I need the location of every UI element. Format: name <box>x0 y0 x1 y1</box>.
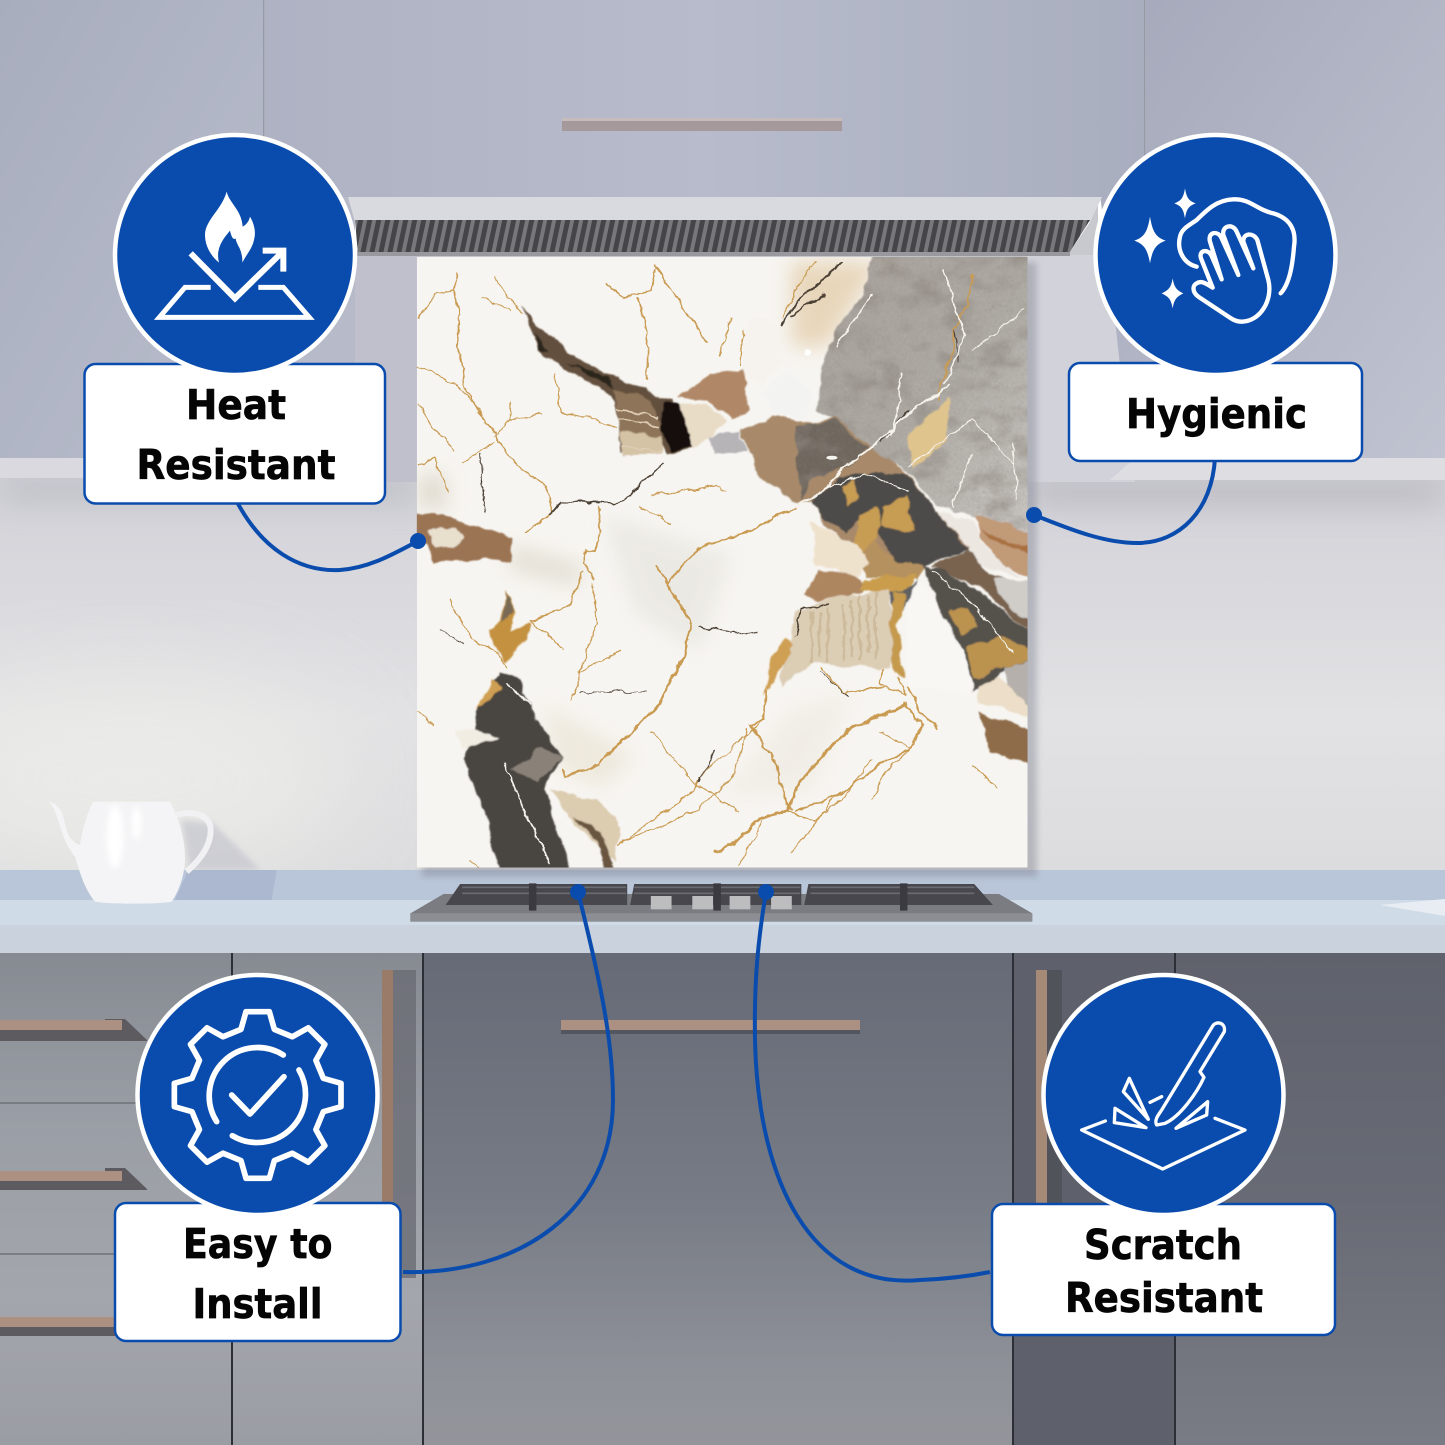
cream patch in grey zone <box>908 397 950 467</box>
white area below band <box>904 577 970 692</box>
counter front <box>0 925 1445 953</box>
label text <box>1065 1221 1263 1322</box>
dark thin veins <box>442 262 958 780</box>
brown right <box>978 710 1028 764</box>
striated brown <box>613 389 661 456</box>
wood stripes <box>615 409 661 451</box>
right upper wall recess <box>1025 250 1135 482</box>
lower cabinet seams <box>232 953 1175 1445</box>
vertical handles <box>382 970 1062 1278</box>
teapot <box>48 802 277 904</box>
hood vent <box>355 220 1090 255</box>
label text: Resistant <box>136 441 336 489</box>
gold splash left <box>488 590 531 661</box>
label box <box>115 1203 400 1341</box>
label box <box>84 364 385 504</box>
icon: gear with check <box>174 1012 341 1178</box>
dark vein <box>523 306 694 456</box>
counter item right <box>1380 899 1445 916</box>
wall shadow under right shelf <box>1030 480 1445 502</box>
white veins <box>504 270 1025 865</box>
marble splashback panel <box>402 234 1057 885</box>
central brown band <box>739 416 970 577</box>
grey zone <box>815 256 1028 533</box>
white gap by dark band <box>938 512 1020 578</box>
counter top <box>0 900 1445 925</box>
wall <box>0 250 1445 875</box>
badge circle <box>1044 975 1284 1215</box>
left brown band <box>402 509 512 564</box>
left shelf edge <box>0 458 355 478</box>
icon: hand wiping with sparkles <box>1134 188 1295 322</box>
label text <box>183 1220 332 1328</box>
gold veins <box>418 262 997 867</box>
connector: hygienic <box>1026 458 1215 543</box>
badge circle <box>115 135 355 375</box>
wall light patch <box>0 680 350 880</box>
icon: knife on surface <box>1082 1023 1245 1169</box>
label text: Resistant <box>1065 1274 1263 1322</box>
connector: heat resistant <box>236 500 426 570</box>
lower right dark band <box>922 565 1028 692</box>
white pebble stones <box>742 368 746 376</box>
wall shadow under left shelf <box>0 478 420 500</box>
feature: scratch resistant <box>992 975 1335 1335</box>
brown chunk <box>802 571 868 604</box>
upper handle <box>562 118 842 131</box>
centre drawer handle <box>561 1020 860 1034</box>
counter backsplash ledge <box>0 870 1445 900</box>
marble masses <box>416 256 1028 868</box>
label text: Scratch <box>1084 1221 1242 1269</box>
soft shading <box>418 262 880 796</box>
feature: easy to install <box>115 975 400 1341</box>
feature: hygienic <box>1069 135 1362 461</box>
lower right cabinets <box>1014 953 1176 1445</box>
left upper wall recess <box>340 250 420 482</box>
connector: easy to install <box>403 884 613 1272</box>
badge circle <box>1096 135 1336 375</box>
brown upper patch <box>677 370 750 421</box>
badge circle <box>138 975 378 1215</box>
upper band grey-brown <box>796 421 868 499</box>
upper left cabinet <box>0 0 264 458</box>
dark lower left mass <box>462 671 575 885</box>
label text: Heat <box>186 381 286 429</box>
cabinet seams <box>264 0 1145 195</box>
brown mass right of band <box>932 549 1053 652</box>
left drawer handles <box>0 1019 147 1336</box>
fibrous section <box>780 590 896 686</box>
icon: flame over surface with arrow <box>159 192 309 317</box>
tan streak right <box>974 515 1028 578</box>
label text: Hygienic <box>1126 390 1307 438</box>
label text <box>136 381 336 489</box>
lower centre cabinet <box>424 953 1014 1445</box>
fibre streaks <box>812 592 876 664</box>
label text: Install <box>192 1280 322 1328</box>
black patch <box>661 401 693 453</box>
lower left cabinets <box>0 953 232 1445</box>
hood <box>348 197 1102 222</box>
panel shadow <box>422 262 1037 877</box>
label box <box>992 1204 1335 1335</box>
connector: scratch resistant <box>755 884 990 1281</box>
label box <box>1069 363 1362 461</box>
gold strip <box>860 574 917 593</box>
hob <box>410 883 1032 922</box>
feature: heat resistant <box>84 135 385 504</box>
right shelf edge <box>1110 458 1445 480</box>
upper centre cabinet <box>265 0 1145 197</box>
gold band patches <box>842 479 914 555</box>
dark band <box>812 473 970 567</box>
tan/white chunk <box>812 519 870 579</box>
label text: Easy to <box>183 1220 332 1268</box>
upper right cabinet <box>1100 0 1445 458</box>
cream inset near dark vein <box>675 405 727 449</box>
grey knot <box>709 431 748 455</box>
white specks on marble <box>805 349 811 356</box>
